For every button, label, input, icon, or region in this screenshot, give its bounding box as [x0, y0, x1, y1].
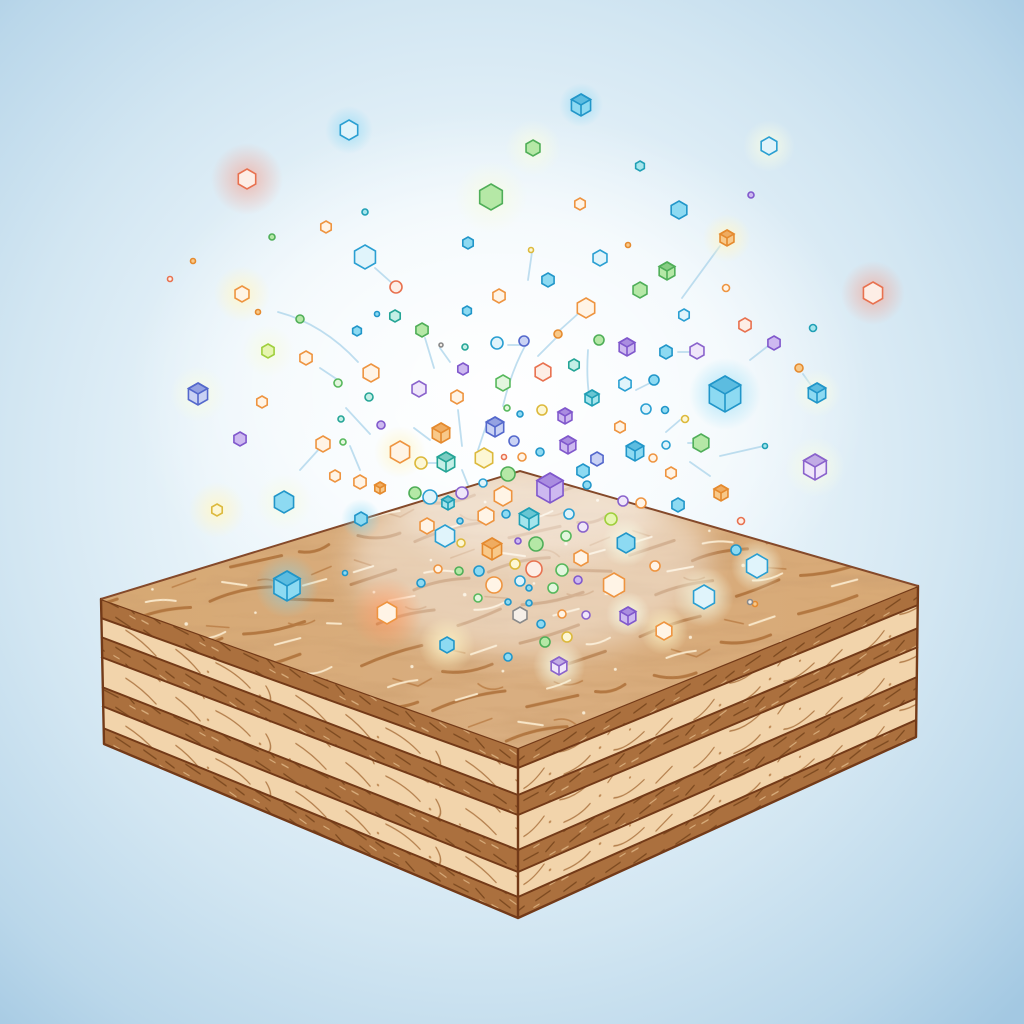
- left face: dark layers: [101, 599, 518, 918]
- cube particles: [188, 94, 826, 675]
- faint connector lines between particles: [278, 246, 813, 490]
- hexagon particles: [212, 120, 883, 653]
- layered board: [90, 460, 930, 918]
- top face with wood fibres: [90, 460, 930, 760]
- small dot particles: [168, 192, 816, 661]
- layer outlines: [101, 586, 918, 918]
- soft white glow above the board: [130, 110, 870, 670]
- particle halos: [170, 83, 905, 692]
- right face: dark layers: [518, 586, 918, 918]
- right face: light layers: [518, 605, 918, 897]
- left face: light layers: [101, 618, 518, 897]
